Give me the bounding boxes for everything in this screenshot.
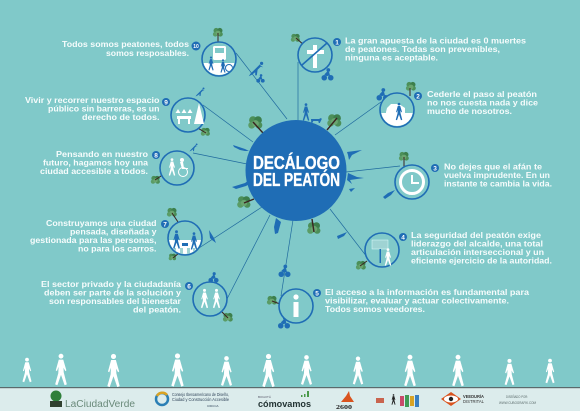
logo: La Ciudad Verde [50,390,135,410]
text 4: La seguridad del peatón exige [411,231,542,240]
text 1: de peatones. Todas son prevenibles, [345,45,500,54]
number badges: 7 [163,222,167,228]
icon 4: sign and person [365,233,399,267]
text 10: Todos somos peatones, todos [62,40,190,49]
text 7 [30,219,157,254]
small trees next to the icons [151,28,416,322]
logo: Bogotá cómo vamos: BOGOTÁ [258,395,271,399]
text 5 [325,288,530,314]
text 3: No dejes que el afán te [444,163,543,172]
number badges: 3 [433,166,437,172]
number badges: 2 [416,94,420,100]
logo: Consejo Iberoamericano: CIDCCA [207,404,219,408]
text 8: ciudad accesible a todos. [40,167,148,176]
logo: Consejo Iberoamericano: Ciudad y Construcción Accesible [172,397,230,402]
text 6 [41,280,182,314]
text 5: El acceso a la información es fundamental para [325,288,530,297]
text 8: Pensando en nuestro [56,150,148,159]
text 7: Construyamos una ciudad [46,219,157,228]
logo: Bogotá cómo vamos [258,391,311,410]
text 1 [345,36,527,62]
logo: 2600: 2600 [336,404,352,411]
text 4: liderazgo del alcalde, una total [411,240,543,248]
icon 7: people crossing with dog [168,221,202,256]
icon 5: information [279,289,313,323]
central circle with title [246,120,346,221]
text 1: La gran apuesta de la ciudad es 0 muertes [345,36,527,46]
logo: Bogotá cómo vamos: cómovamos [258,399,311,410]
footer band [0,387,580,411]
number badges: 9 [164,100,168,106]
text 2: Cederle el paso al peatón [427,90,537,99]
designer credit: DISEÑADO POR: [506,394,528,399]
icon 10: bus and people [202,42,236,77]
text 9: Vivir y recorrer nuestro espacio [25,96,160,105]
number badges: 5 [315,290,319,298]
trees around the central circle [237,114,341,234]
number badges: 1 [335,40,339,46]
icon 1: no deaths cross [298,38,332,72]
number badges: 10 [193,44,199,50]
row of white walkers [22,353,555,387]
logo: La Ciudad Verde: LaCiudadVerde [65,399,135,410]
text 2 [427,90,539,116]
text 6: deben ser parte de la solución y [44,288,182,298]
text 6: son responsables del bienestar [49,297,181,306]
blue pedestrians and cyclists [189,62,395,329]
text 9: derecho de todos. [82,113,160,122]
text 7: pensada, diseñada y [70,228,157,236]
number badges: 8 [154,152,158,160]
text 10 [62,40,190,58]
number badges: 6 [187,284,191,290]
text 2: no nos cuesta nada y dice [427,98,539,108]
text 3 [444,163,552,188]
icon 3: clock [395,165,429,199]
text 5: Todos somos veedores. [325,305,425,314]
text 10: somos resposables. [106,49,189,58]
text 2: mucho de nosotros. [427,107,512,116]
logo: pedestrian collective [376,394,419,407]
designer credit: WWW.CUBOGRAFIK.COM [499,400,536,405]
text 9: público sin barreras, es un [48,104,160,114]
logo: Veeduría Distrital [441,392,485,406]
logo: 2600 [336,391,354,411]
logo: Consejo Iberoamericano [156,392,230,408]
text 8 [40,150,149,176]
text 4 [411,231,552,266]
icon 8: person pushing wheelchair [160,151,194,185]
title: DECÁLOGO [253,152,340,173]
number badges [152,38,439,298]
text 7: gestionada para las personas, [30,236,156,245]
text 3: instante te cambia la vida. [444,180,552,188]
logo: Veeduría Distrital: VEEDURÍA [463,392,485,399]
text 7: no para los carros. [78,244,156,254]
text 4: eficiente ejercicio de la autoridad. [411,256,552,266]
text 3: vuelva imprudente. En un [444,171,550,180]
icon 2: car and pedestrian [380,93,414,129]
number badges: 4 [401,234,405,242]
icon 6: two people handshake [193,282,227,316]
designer credit [499,394,536,405]
logo: Consejo Iberoamericano: Consejo Iberoamericano de Diseño, [172,392,229,397]
text 5: visibilizar, evaluar y actuar colectivamente. [325,296,509,306]
text 6: del peatón. [133,306,181,314]
icon 9: trees and bench [171,98,205,132]
text 4: articulación interseccional y un [411,248,544,257]
text 8: futuro, hagamos hoy una [43,158,149,168]
text 1: ninguna es aceptable. [345,54,438,62]
connector lines [193,53,400,299]
text 6: El sector privado y la ciudadanía [41,280,182,289]
logo: Veeduría Distrital: DISTRITAL [463,399,484,404]
text 9 [25,96,160,122]
title: DEL PEATÓN [253,169,340,190]
